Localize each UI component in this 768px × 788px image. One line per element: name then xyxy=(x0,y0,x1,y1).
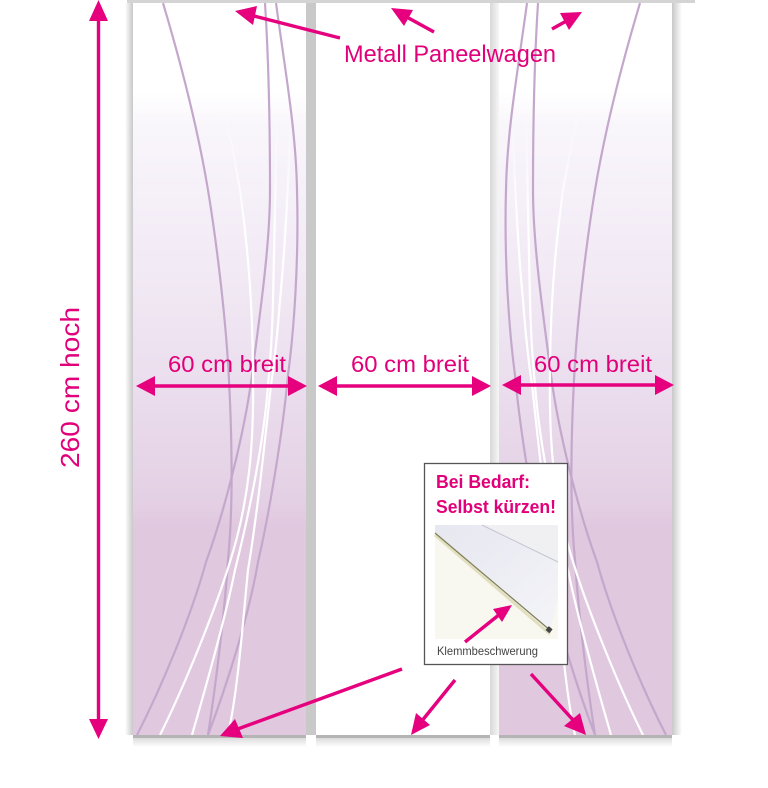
top rail xyxy=(127,0,695,3)
arrow: center width xyxy=(318,376,491,396)
label: Klemmbeschwerung: Klemmbeschwerung xyxy=(437,644,538,658)
arrow: right width xyxy=(502,375,674,395)
label: right width: 60 cm breit xyxy=(534,351,653,377)
arrow: bottom right xyxy=(531,674,586,735)
arrow: carrier right xyxy=(552,12,582,30)
photo: clamp weight rod xyxy=(435,525,558,639)
side shadows xyxy=(125,3,682,735)
panel: left fabric xyxy=(133,3,306,735)
panel: right fabric xyxy=(499,3,672,735)
infographic: panel curtain dimensions xyxy=(60,0,695,745)
callout heading: Bei Bedarf: xyxy=(436,472,530,492)
arrow: to clamp weight xyxy=(465,605,512,642)
arrow: left width xyxy=(136,376,307,396)
panel: center fabric xyxy=(316,3,490,735)
label: left width: 60 cm breit xyxy=(168,351,287,377)
curved line pattern, right panel xyxy=(506,3,666,735)
bottom weight bars with shadow xyxy=(133,735,672,747)
callout heading: Selbst kürzen! xyxy=(436,497,556,517)
callout heading xyxy=(436,472,556,517)
arrow: bottom center xyxy=(411,680,455,735)
label: Metall Paneelwagen: Metall Paneelwagen xyxy=(344,41,556,68)
dimension: height arrow xyxy=(89,0,108,739)
arrow: carrier left xyxy=(235,6,340,38)
curved line pattern, left panel xyxy=(137,3,297,735)
arrow: carrier center xyxy=(391,8,434,32)
label: center width: 60 cm breit xyxy=(351,351,470,377)
label: 260 cm hoch: 260 cm hoch xyxy=(55,307,85,468)
callout: Bei Bedarf selbst kürzen xyxy=(424,464,568,664)
arrow: bottom left xyxy=(220,669,402,738)
